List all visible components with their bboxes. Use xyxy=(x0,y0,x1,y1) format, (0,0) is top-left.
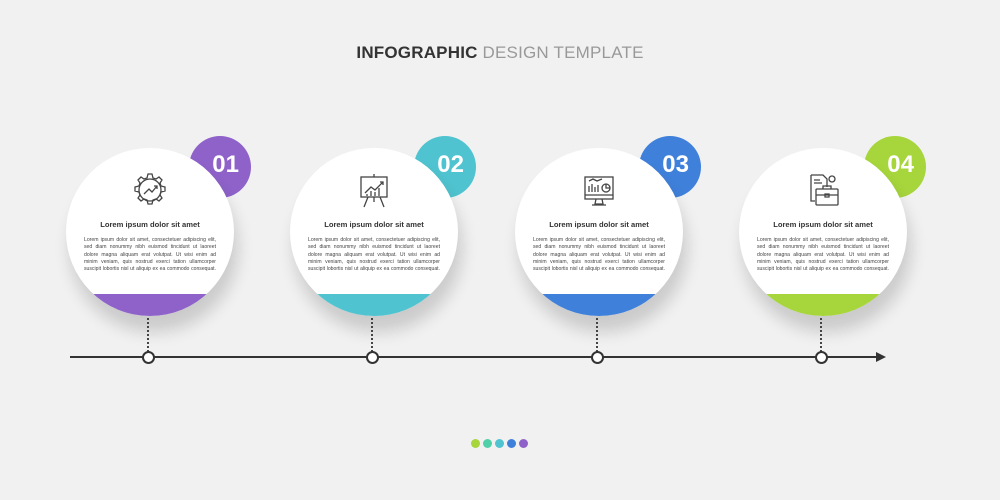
text block: suscipit lobortis nisl ut aliquip ex ea commodo consequat. xyxy=(84,266,216,272)
badge 01: 01 xyxy=(212,151,239,178)
text block: sed diam nonummy nibh euismod tincidunt ut laoreet xyxy=(757,244,889,250)
connector 4 xyxy=(820,318,822,352)
badge 01 xyxy=(189,136,251,198)
heading: Lorem ipsum dolor sit amet xyxy=(324,220,424,229)
text block xyxy=(308,237,440,272)
heading: Lorem ipsum dolor sit amet xyxy=(773,220,873,229)
node 2 xyxy=(366,351,379,364)
text block xyxy=(84,237,216,272)
text block xyxy=(757,237,889,272)
text block xyxy=(533,237,665,272)
heading: Lorem ipsum dolor sit amet xyxy=(100,220,200,229)
text block: sed diam nonummy nibh euismod tincidunt ut laoreet xyxy=(84,244,216,250)
badge 02: 02 xyxy=(437,151,464,178)
text block: Lorem ipsum dolor sit amet, consectetuer adipiscing elit, xyxy=(533,237,665,243)
text block: minim veniam, quis nostrud exerci tation ullamcorper xyxy=(308,259,440,265)
text block: dolore magna aliquam erat volutpat. Ut wisi enim ad xyxy=(84,252,216,258)
panel: step 2 xyxy=(290,148,458,316)
node 3 xyxy=(591,351,604,364)
node 1 xyxy=(142,351,155,364)
badge 04: 04 xyxy=(887,151,914,178)
text block: dolore magna aliquam erat volutpat. Ut wisi enim ad xyxy=(308,252,440,258)
connector 1 xyxy=(147,318,149,352)
icon: briefcase documents xyxy=(810,174,839,206)
node 4 xyxy=(815,351,828,364)
panel: step 3 xyxy=(515,148,683,316)
icon: gear chart xyxy=(134,173,166,205)
text block: Lorem ipsum dolor sit amet, consectetuer adipiscing elit, xyxy=(757,237,889,243)
text block: sed diam nonummy nibh euismod tincidunt ut laoreet xyxy=(308,244,440,250)
text block: minim veniam, quis nostrud exerci tation ullamcorper xyxy=(84,259,216,265)
connector 3 xyxy=(596,318,598,352)
title: INFOGRAPHIC DESIGN TEMPLATE xyxy=(356,43,644,62)
heading: Lorem ipsum dolor sit amet xyxy=(549,220,649,229)
badge 04 xyxy=(864,136,926,198)
badge 02 xyxy=(414,136,476,198)
panel: step 4 xyxy=(739,148,907,316)
badge 03: 03 xyxy=(662,151,689,178)
text block: suscipit lobortis nisl ut aliquip ex ea commodo consequat. xyxy=(308,266,440,272)
icon: presentation chart xyxy=(360,174,388,208)
text block: dolore magna aliquam erat volutpat. Ut wisi enim ad xyxy=(533,252,665,258)
text block: minim veniam, quis nostrud exerci tation ullamcorper xyxy=(533,259,665,265)
icon: monitor charts xyxy=(584,176,614,206)
connector 2 xyxy=(371,318,373,352)
text block: sed diam nonummy nibh euismod tincidunt ut laoreet xyxy=(533,244,665,250)
text block: dolore magna aliquam erat volutpat. Ut wisi enim ad xyxy=(757,252,889,258)
panel: step 1 xyxy=(66,148,234,316)
text block: suscipit lobortis nisl ut aliquip ex ea commodo consequat. xyxy=(533,266,665,272)
text block: Lorem ipsum dolor sit amet, consectetuer adipiscing elit, xyxy=(84,237,216,243)
badge 03 xyxy=(639,136,701,198)
text block: minim veniam, quis nostrud exerci tation ullamcorper xyxy=(757,259,889,265)
text block: Lorem ipsum dolor sit amet, consectetuer adipiscing elit, xyxy=(308,237,440,243)
text block: suscipit lobortis nisl ut aliquip ex ea commodo consequat. xyxy=(757,266,889,272)
